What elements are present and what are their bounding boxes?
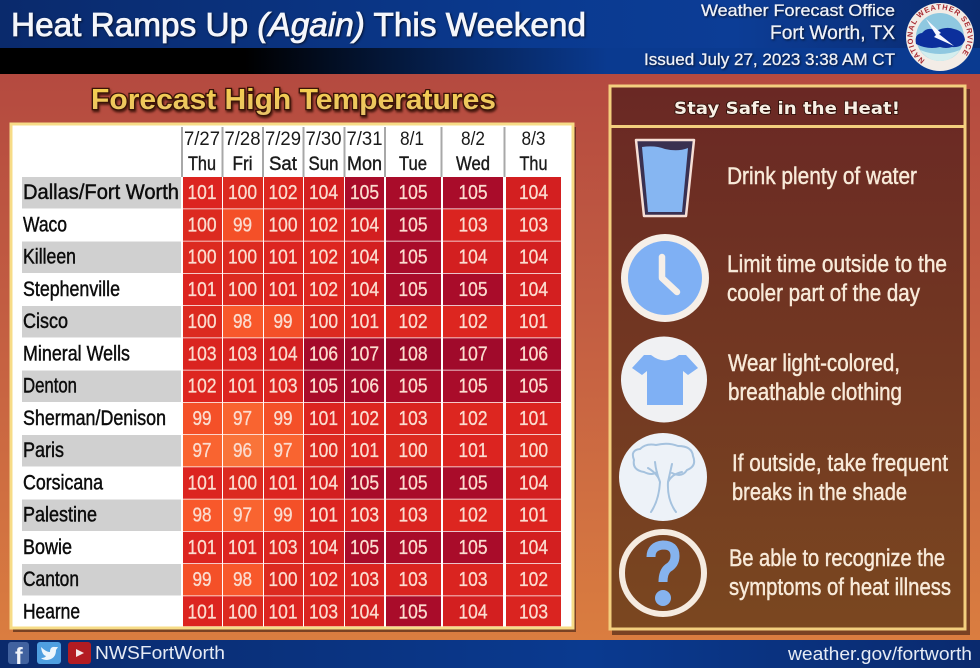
row: Mineral Wells: Mineral Wells <box>23 342 130 365</box>
row: Cisco: 101 <box>350 311 379 333</box>
row: Stephenville: 105 <box>458 279 488 301</box>
row: Canton: 102 <box>309 569 338 591</box>
row: Cisco: 101 <box>519 311 548 333</box>
row: Canton <box>22 564 561 596</box>
row: Palestine: 98 <box>192 504 212 526</box>
row: Stephenville: 104 <box>519 279 548 301</box>
office information <box>644 1 895 69</box>
row: Cisco: 102 <box>458 311 488 333</box>
row: Palestine: 102 <box>458 504 488 526</box>
row: Killeen: 101 <box>268 246 298 268</box>
tip: wear light-colored clothing <box>728 350 902 406</box>
table column headers: 8/1 <box>400 129 424 150</box>
row: Mineral Wells: 107 <box>350 343 379 365</box>
table column headers: Tue <box>399 154 427 175</box>
row: Hearne: 101 <box>268 601 298 623</box>
row: Dallas/Fort Worth: 105 <box>350 182 379 204</box>
footer band <box>0 640 980 668</box>
row: Waco: 99 <box>233 214 252 236</box>
table column headers: Thu <box>520 154 548 175</box>
row: Paris: 100 <box>519 440 548 462</box>
row: Canton: 98 <box>233 569 252 591</box>
icon: clock <box>621 234 709 322</box>
office information: Weather Forecast Office <box>701 1 895 20</box>
row: Palestine: 97 <box>233 504 252 526</box>
row: Palestine <box>22 500 561 531</box>
title: Heat Ramps Up (Again) This Weekend <box>11 6 586 43</box>
row: Hearne <box>23 596 561 626</box>
row: Killeen: 105 <box>398 246 428 268</box>
row: Killeen: 104 <box>458 246 488 268</box>
table column headers: Sat <box>269 154 298 175</box>
tip: limit time outside <box>727 251 947 307</box>
row: Stephenville: 102 <box>309 279 338 301</box>
row: Bowie: 101 <box>228 537 257 559</box>
icon: youtube <box>68 642 91 664</box>
row: Killeen: Killeen <box>23 246 76 268</box>
table column headers <box>182 127 548 177</box>
row: Paris: 97 <box>274 440 292 462</box>
row: Palestine: Palestine <box>23 504 97 526</box>
row: Sherman/Denison: Sherman/Denison <box>23 407 166 430</box>
row: Cisco: 100 <box>309 311 338 333</box>
row: Bowie: 105 <box>350 537 379 559</box>
row: Denton: 105 <box>519 376 548 398</box>
row: Hearne: 104 <box>458 601 488 623</box>
row: Mineral Wells: 106 <box>309 343 338 365</box>
row: Stephenville: 105 <box>398 279 428 301</box>
row: Palestine: 101 <box>309 504 338 526</box>
website: weather.gov/fortworth <box>787 644 972 664</box>
row: Denton: 106 <box>350 376 379 398</box>
icon: National Weather Service logo: NATIONAL WEATHER SERVICE <box>907 4 973 64</box>
row: Dallas/Fort Worth: 105 <box>398 182 428 204</box>
row: Paris <box>22 435 561 466</box>
row: Hearne: Hearne <box>23 600 80 623</box>
row: Killeen: 104 <box>519 246 548 268</box>
tip: drink plenty of water: Drink plenty of water <box>727 163 917 190</box>
row: Hearne: 105 <box>398 601 428 623</box>
row: Hearne: 101 <box>188 601 216 623</box>
row: Bowie: 103 <box>268 537 298 559</box>
row: Stephenville: 101 <box>268 279 298 301</box>
row: Denton: 103 <box>268 376 298 398</box>
tip: limit time outside: cooler part of the day <box>727 280 920 307</box>
icon: t-shirt <box>621 336 707 422</box>
row: Bowie: 104 <box>309 537 338 559</box>
row: Cisco: 102 <box>398 311 428 333</box>
row: Dallas/Fort Worth: 101 <box>188 182 216 204</box>
row: Hearne: 103 <box>309 601 338 623</box>
row: Bowie: 101 <box>188 537 216 559</box>
row: Stephenville <box>23 274 561 305</box>
tip: breaks in the shade <box>732 450 948 506</box>
row: Hearne: 103 <box>519 601 548 623</box>
row: Paris: 101 <box>458 440 488 462</box>
table column headers: Sun <box>308 154 338 175</box>
table column headers: 7/27 <box>184 129 220 150</box>
row: Paris: 100 <box>398 440 428 462</box>
row: Cisco: 100 <box>188 311 216 333</box>
row: Dallas/Fort Worth: 104 <box>519 182 548 204</box>
row: Corsicana: 100 <box>228 472 257 494</box>
row: Mineral Wells: 103 <box>228 343 257 365</box>
row: Sherman/Denison: 102 <box>350 408 379 430</box>
row: Paris: 96 <box>233 440 252 462</box>
table column headers: 7/30 <box>306 129 342 150</box>
row: Canton: 99 <box>192 569 212 591</box>
row: Sherman/Denison: 102 <box>458 408 488 430</box>
row: Bowie: 104 <box>519 537 548 559</box>
row: Mineral Wells: 106 <box>519 343 548 365</box>
heading: forecast high temperatures: Forecast High Temperatures <box>91 84 496 116</box>
table column headers: 8/2 <box>461 129 485 150</box>
row: Stephenville: 101 <box>188 279 216 301</box>
row: Mineral Wells: 108 <box>398 343 428 365</box>
row: Corsicana: 104 <box>309 472 338 494</box>
row: Waco <box>23 209 561 241</box>
row: Sherman/Denison: 103 <box>398 408 428 430</box>
row: Dallas/Fort Worth: 104 <box>309 182 338 204</box>
row: Canton: Canton <box>23 568 79 591</box>
row: Dallas/Fort Worth <box>22 177 561 208</box>
row: Canton: 103 <box>458 569 488 591</box>
row: Paris: 97 <box>192 440 212 462</box>
row: Killeen <box>22 242 561 273</box>
tip: wear light-colored clothing: Wear light-colored, <box>728 350 900 377</box>
row: Canton: 103 <box>350 569 379 591</box>
row: Bowie: Bowie <box>23 536 72 559</box>
panel heading: Stay Safe in the Heat! <box>674 99 900 119</box>
row: Corsicana: 105 <box>398 472 428 494</box>
row: Corsicana <box>23 467 561 499</box>
row: Corsicana: 104 <box>519 472 548 494</box>
row: Cisco <box>22 306 561 338</box>
row: Corsicana: 101 <box>188 472 216 494</box>
row: Denton: Denton <box>23 374 77 398</box>
row: Stephenville: Stephenville <box>23 278 120 301</box>
tip: breaks in the shade: If outside, take frequent <box>732 450 948 477</box>
tip: wear light-colored clothing: breathable clothing <box>728 379 902 406</box>
row: Cisco: 98 <box>233 311 252 333</box>
row: Hearne: 104 <box>350 601 379 623</box>
row: Mineral Wells <box>23 338 561 370</box>
row: Mineral Wells: 103 <box>188 343 216 365</box>
row: Dallas/Fort Worth: 102 <box>268 182 298 204</box>
social handle: NWSFortWorth <box>95 643 225 663</box>
row: Killeen: 100 <box>188 246 216 268</box>
row: Dallas/Fort Worth: 100 <box>228 182 257 204</box>
row: Denton: 102 <box>188 376 216 398</box>
row: Dallas/Fort Worth: Dallas/Fort Worth <box>23 181 179 204</box>
row: Palestine: 101 <box>519 504 548 526</box>
row: Bowie <box>23 532 561 563</box>
row: Sherman/Denison: 101 <box>519 408 548 430</box>
row: Stephenville: 104 <box>350 279 379 301</box>
row: Stephenville: 100 <box>228 279 257 301</box>
icon: glass of water <box>636 140 694 216</box>
row: Mineral Wells: 104 <box>268 343 298 365</box>
table column headers: 7/28 <box>224 129 260 150</box>
table column headers: Mon <box>347 154 382 175</box>
row: Dallas/Fort Worth: 105 <box>458 182 488 204</box>
row: Denton: 101 <box>228 376 257 398</box>
row: Killeen: 104 <box>350 246 379 268</box>
row: Waco: 104 <box>350 214 379 236</box>
table column headers: Fri <box>232 154 252 175</box>
row: Killeen: 100 <box>228 246 257 268</box>
row: Waco: 100 <box>268 214 298 236</box>
row: Paris: 101 <box>350 440 379 462</box>
row: Waco: 103 <box>458 214 488 236</box>
panel: stay safe in the heat <box>610 86 970 635</box>
row: Killeen: 102 <box>309 246 338 268</box>
row: Sherman/Denison: 99 <box>274 408 292 430</box>
row: Canton: 103 <box>398 569 428 591</box>
row: Corsicana: Corsicana <box>23 471 103 494</box>
icon: question mark <box>622 532 704 614</box>
row: Denton: 105 <box>398 376 428 398</box>
row: Waco: 105 <box>398 214 428 236</box>
row: Cisco: Cisco <box>23 310 68 333</box>
row: Denton: 105 <box>309 376 338 398</box>
row: Canton: 102 <box>519 569 548 591</box>
row: Corsicana: 105 <box>350 472 379 494</box>
row: Bowie: 105 <box>398 537 428 559</box>
table column headers: 7/29 <box>265 129 301 150</box>
office information: Issued July 27, 2023 3:38 AM CT <box>644 50 895 69</box>
header band <box>0 0 980 74</box>
table column headers: Wed <box>456 154 490 175</box>
table column headers: 7/31 <box>346 129 382 150</box>
row: Paris: 100 <box>309 440 338 462</box>
tip: breaks in the shade: breaks in the shade <box>732 479 907 506</box>
row: Paris: Paris <box>23 439 64 462</box>
row: Canton: 100 <box>268 569 298 591</box>
icon: shade tree <box>619 433 707 521</box>
row: Denton <box>22 370 561 402</box>
row: Sherman/Denison: 97 <box>233 408 252 430</box>
row: Denton: 105 <box>458 376 488 398</box>
row: Sherman/Denison: 101 <box>309 408 338 430</box>
tip: recognize symptoms <box>729 545 951 601</box>
row: Corsicana: 105 <box>458 472 488 494</box>
row: Hearne: 100 <box>228 601 257 623</box>
row: Waco: 102 <box>309 214 338 236</box>
panel: forecast table <box>11 124 576 632</box>
icon: facebook <box>8 642 29 668</box>
row: Sherman/Denison <box>23 403 561 434</box>
table column headers: 8/3 <box>522 129 546 150</box>
tip: limit time outside: Limit time outside to the <box>727 251 947 278</box>
row: Waco: 100 <box>188 214 216 236</box>
row: Cisco: 99 <box>274 311 292 333</box>
icon: twitter <box>37 642 61 664</box>
row: Mineral Wells: 107 <box>458 343 488 365</box>
row: Palestine: 103 <box>350 504 379 526</box>
row: Sherman/Denison: 99 <box>192 408 212 430</box>
row: Waco: 103 <box>519 214 548 236</box>
row: Palestine: 103 <box>398 504 428 526</box>
row: Palestine: 99 <box>274 504 292 526</box>
table column headers: Thu <box>188 154 216 175</box>
row: Bowie: 105 <box>458 537 488 559</box>
row: Waco: Waco <box>23 213 67 236</box>
office information: Fort Worth, TX <box>770 23 895 44</box>
row: Corsicana: 101 <box>268 472 298 494</box>
